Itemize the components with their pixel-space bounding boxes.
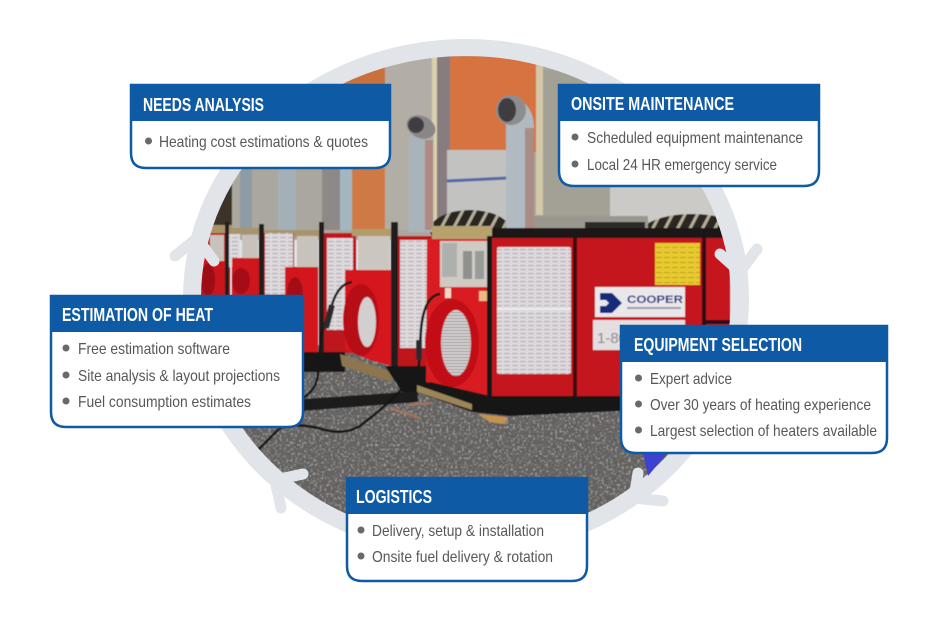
arrow: bottom left: [275, 474, 303, 508]
cables: [258, 294, 440, 450]
panel: estimation of heat: [50, 295, 304, 427]
photo: row of red heaters on a construction site: 1-80: [597, 330, 627, 347]
arrow: right: [720, 249, 757, 272]
list: onsite maintenance: Local 24 HR emergency service: [587, 157, 777, 174]
list: equipment selection: Largest selection of heaters available: [650, 423, 877, 440]
far heater 2: [229, 228, 263, 234]
wall: [232, 56, 556, 241]
list: estimation of heat: Free estimation software: [78, 341, 230, 358]
list: estimation of heat: Site analysis & layout projections: [78, 368, 280, 385]
heading: needs analysis: NEEDS ANALYSIS: [143, 95, 264, 115]
photo: row of red heaters on a construction site: [201, 56, 731, 514]
heading: estimation of heat: [50, 295, 304, 332]
list: equipment selection: [635, 371, 877, 440]
heading: estimation of heat: ESTIMATION OF HEAT: [62, 305, 213, 325]
circular process ring: [183, 39, 749, 557]
list: estimation of heat: Fuel consumption estimates: [78, 394, 251, 411]
heading: equipment selection: EQUIPMENT SELECTION: [634, 335, 802, 355]
list: onsite maintenance: Scheduled equipment maintenance: [587, 130, 803, 147]
panel: logistics: [346, 477, 588, 581]
list: logistics: Delivery, setup & installation: [372, 523, 544, 540]
ground: [242, 344, 668, 514]
base & pallet: [417, 382, 640, 416]
logo sign: [595, 287, 685, 317]
list: onsite maintenance: [572, 130, 803, 174]
heading: onsite maintenance: ONSITE MAINTENANCE: [571, 94, 734, 114]
far heater 1: [210, 224, 232, 234]
heading: needs analysis: [130, 84, 391, 121]
heading: onsite maintenance: [558, 84, 820, 121]
arrow: bottom right: [634, 473, 663, 501]
pipes: [416, 128, 421, 232]
logo sign: COOPER: [627, 294, 683, 306]
far heater 4: [324, 233, 356, 353]
arrow: top left: [175, 238, 214, 261]
panel: equipment selection: [620, 325, 888, 453]
list: estimation of heat: [62, 341, 280, 411]
list: logistics: Onsite fuel delivery & rotation: [372, 549, 553, 566]
panel: needs analysis: [130, 84, 391, 168]
heading: equipment selection: [620, 325, 888, 362]
list: equipment selection: Expert advice: [650, 371, 732, 388]
heading: logistics: LOGISTICS: [356, 487, 432, 507]
far heater 3: [264, 230, 324, 237]
front heater: [490, 228, 730, 238]
blue wedge behind equipment panel: [643, 452, 668, 476]
list: needs analysis: Heating cost estimations & quotes: [159, 134, 368, 151]
bases of far heaters: [303, 352, 345, 372]
panel: onsite maintenance: [558, 84, 820, 186]
heading: logistics: [346, 477, 588, 514]
list: logistics: [358, 523, 553, 566]
list: equipment selection: Over 30 years of heating experience: [650, 397, 871, 414]
